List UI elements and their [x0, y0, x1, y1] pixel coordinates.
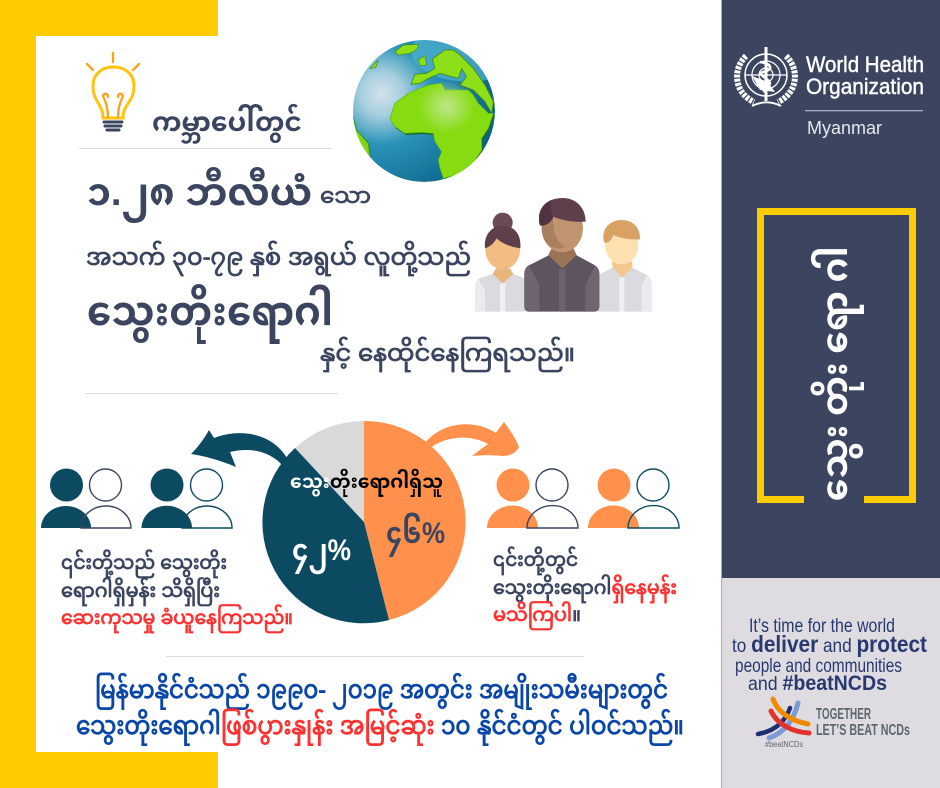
footer statement: မြန်မာနိုင်ငံသည် ၁၉၉၀- ၂၀၁၉ အတွင်း အမျိုးသမီးများတွင်: [95, 672, 668, 710]
icon: right people pair one: [487, 468, 578, 528]
value: 42 percent: ၄၂%: [292, 534, 351, 574]
text: adults aged 30-79: အသက် ၃၀-၇၉ နှစ် အရွယ် လူတို့သည်: [86, 241, 471, 276]
slice: no hypertension: [295, 421, 364, 522]
text block: treated group: ဆေးကုသမှု ခံယူနေကြသည်။: [61, 603, 293, 634]
text block: undiagnosed group: မသိကြပါ။: [493, 600, 581, 630]
icon: globe: [353, 40, 495, 182]
campaign line one: It’s time for the world: [749, 616, 895, 637]
europe and asia: [411, 50, 493, 113]
south america and madagascar: [353, 114, 484, 158]
yellow bracket frame: [760, 212, 912, 500]
text block: undiagnosed group: [493, 545, 677, 630]
greenland and islands: [370, 44, 427, 68]
text block: treated group: ၎င်းတို့သည် သွေးတိုး: [61, 548, 227, 579]
panel: grey campaign box: [722, 578, 940, 788]
campaign line four: and #beatNCDs: [748, 672, 887, 695]
WHO name line two: Organization: [806, 74, 924, 99]
footer statement: [76, 672, 684, 746]
arrow: dark teal to treated group: [191, 430, 287, 467]
stat: 1.28 billion: ၁.၂၈ ဘီလီယံ: [87, 166, 312, 223]
icon: left people pair one: [41, 468, 131, 528]
icon: left people pair two: [142, 468, 232, 528]
logo hashtag: #beatNCDs: [765, 740, 803, 749]
text block: undiagnosed group: သွေးတိုးရောဂါရှိနေမှန်း: [493, 573, 677, 604]
text: of: သော: [320, 183, 371, 208]
africa: [390, 83, 493, 178]
heading: hypertension: သွေးတိုးရောဂါ: [87, 285, 333, 343]
value: 46 percent: ၄၆%: [386, 511, 445, 557]
heading: on earth: ကမ္ဘာပေါ်တွင်: [152, 103, 302, 144]
text: living with: နှင့် နေထိုင်နေကြရသည်။: [320, 337, 575, 372]
slice: 42 percent treated: [262, 448, 389, 623]
pie chart: [262, 421, 466, 623]
text block: undiagnosed group: ၎င်းတို့တွင်: [493, 545, 578, 575]
together label: TOGETHER: [816, 706, 871, 723]
icon: right people pair two: [588, 468, 679, 528]
arrow: orange to undiagnosed group: [424, 422, 519, 456]
slice: 46 percent undiagnosed: [364, 421, 466, 620]
panel: right navy sidebar: [721, 0, 940, 788]
beat NCDs logo: [758, 699, 809, 738]
WHO Myanmar label: Myanmar: [807, 118, 882, 138]
campaign line three: people and communities: [735, 656, 902, 677]
pie label: သွေးတိုးရောဂါရှိသူ: [290, 468, 443, 497]
text block: treated group: [61, 548, 293, 634]
icon: light bulb: [87, 53, 139, 130]
vertical title: သွေး တိုး ရော ဂါ: [811, 246, 864, 501]
footer statement: သွေးတိုးရောဂါဖြစ်ပွားနှုန်း အမြင့်ဆုံး ၁၀ နိုင်ငံတွင် ပါဝင်သည်။: [76, 708, 684, 746]
text block: treated group: ရောဂါရှိမှန်း သိရှိပြီး: [61, 576, 220, 607]
campaign line two: to deliver and protect: [732, 631, 927, 657]
WHO emblem: [737, 47, 795, 106]
yellow frame block: [0, 0, 218, 788]
icon: three people: [475, 198, 652, 312]
WHO name: World Health: [806, 52, 924, 77]
